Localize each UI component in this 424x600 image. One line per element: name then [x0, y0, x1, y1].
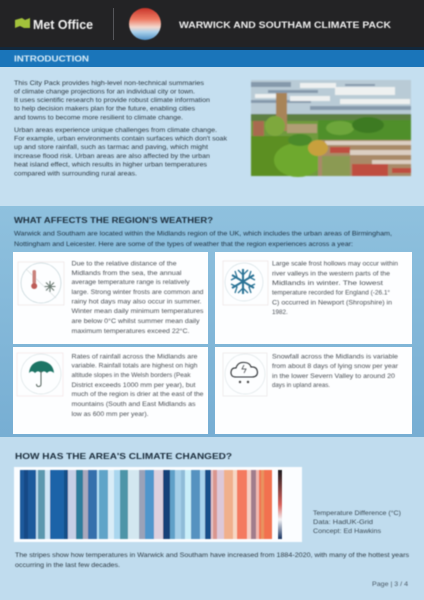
introduction text: to help decision makers plan for the future, enabling cities: [14, 106, 196, 112]
header divider: [113, 8, 114, 40]
introduction text: of climate change projections for an individual city or town.: [14, 88, 195, 96]
introduction text: For example, urban environments contain surfaces which don't soak: [14, 136, 228, 142]
stripes description: occurring in the last few decades.: [15, 562, 120, 569]
introduction text: up and store rainfall, such as tarmac and paving, which might: [14, 144, 208, 151]
icon: snow cloud: [223, 353, 267, 396]
pack title: WARWICK AND SOUTHAM CLIMATE PACK: [179, 20, 391, 31]
climate change section: [0, 437, 424, 600]
climate heading: HOW HAS THE AREA'S CLIMATE CHANGED?: [15, 451, 232, 461]
rainfall text: mountains (South and East Midlands as: [72, 401, 196, 408]
rainfall text: altitude slopes in the Welsh borders (Peak: [72, 372, 191, 379]
frost text: temperature recorded for England (-26.1°: [272, 288, 390, 296]
introduction text: It uses scientific research to provide robust climate information: [14, 97, 210, 104]
climate pack emblem: [129, 8, 161, 40]
icon: thermometer and snowflake: [18, 262, 64, 305]
temperature text: rainy hot days may also occur in summer.: [72, 298, 202, 306]
stripes credits: Data: HadUK-Grid: [313, 519, 374, 526]
weather section: [0, 206, 424, 437]
temperature text: Midlands from the sea, the annual: [72, 270, 182, 277]
weather intro text: Nottingham and Leicester. Here are some of the types of weather that the region experiences across a year:: [14, 241, 353, 248]
stripes credits: Concept: Ed Hawkins: [313, 528, 381, 535]
stripes colour scale: [278, 470, 282, 539]
snowfall text: days in upland areas.: [272, 382, 330, 389]
frost text: Midlands in winter. The lowest: [272, 280, 383, 287]
temperature text: average temperature range is relatively: [72, 279, 190, 286]
frost text: 1982.: [272, 309, 288, 316]
stripes credits: Temperature Difference (°C): [313, 509, 401, 517]
icon: snowflake: [223, 261, 268, 305]
climate stripes chart: [14, 467, 302, 542]
card: rainfall: [13, 347, 208, 434]
introduction text: Urban areas experience unique challenges from climate change.: [14, 127, 217, 134]
card: snowfall: [215, 347, 412, 434]
introduction section: [0, 50, 424, 207]
weather intro text: [14, 230, 392, 248]
photo of Warwick: [251, 80, 411, 177]
card: temperature: [13, 252, 208, 344]
card: frost: [215, 252, 412, 344]
stripes description: [15, 552, 410, 569]
rainfall text: low as 600 mm per year).: [72, 411, 149, 418]
snowfall text: in the lower Severn Valley to around 20: [272, 373, 396, 380]
frost text: C) occurred in Newport (Shropshire) in: [272, 300, 393, 306]
temperature text: maximum temperatures exceed 22°C.: [72, 327, 190, 335]
stripes credits: [313, 509, 401, 535]
introduction text: increase flood risk. Urban areas are also affected by the urban: [14, 153, 210, 160]
icon: umbrella: [17, 353, 63, 396]
rainfall text: [72, 354, 204, 418]
temperature text: Winter mean daily minimum temperatures: [72, 308, 204, 315]
introduction heading bar: [0, 50, 424, 67]
rainfall text: variable. Rainfall totals are highest on high: [72, 362, 198, 370]
introduction text: and towns to become more resilient to climate change.: [14, 114, 183, 122]
temperature text: Due to the relative distance of the: [72, 260, 177, 268]
frost text: Large scale frost hollows may occur within: [272, 260, 399, 268]
page number: Page | 3 / 4: [372, 581, 409, 588]
temperature text: large. Strong winter frosts are common and: [72, 289, 204, 296]
weather heading: WHAT AFFECTS THE REGION'S WEATHER?: [14, 216, 213, 225]
rainfall text: Rates of rainfall across the Midlands are: [72, 354, 198, 360]
introduction heading bar: INTRODUCTION: [14, 54, 89, 64]
frost text: river valleys in the western parts of the: [272, 270, 391, 278]
rainfall text: District exceeds 1000 mm per year), but: [72, 382, 196, 389]
Met Office logo: Met Office: [33, 17, 93, 32]
frost text: [272, 260, 399, 316]
snowfall text: Snowfall across the Midlands is variable: [272, 354, 399, 360]
weather intro text: Warwick and Southam are located within the Midlands region of the UK, which includes the urban areas of Birmingham,: [14, 230, 392, 238]
header band: [0, 0, 424, 50]
introduction text: This City Pack provides high-level non-technical summaries: [14, 80, 205, 87]
introduction text: heat island effect, which results in higher urban temperatures: [14, 162, 208, 168]
introduction text: [14, 80, 228, 178]
rainfall text: much of the region is drier at the east of the: [72, 391, 204, 398]
snowfall text: [272, 354, 399, 389]
temperature text: [72, 260, 204, 335]
introduction text: compared with surrounding rural areas.: [14, 170, 137, 178]
stripes description: The stripes show how temperatures in Warwick and Southam have increased from 1884-2020, with many of the hottest years: [15, 552, 410, 559]
temperature text: are below 0°C whilst summer mean daily: [72, 317, 200, 325]
snowfall text: from about 8 days of lying snow per year: [272, 363, 398, 370]
